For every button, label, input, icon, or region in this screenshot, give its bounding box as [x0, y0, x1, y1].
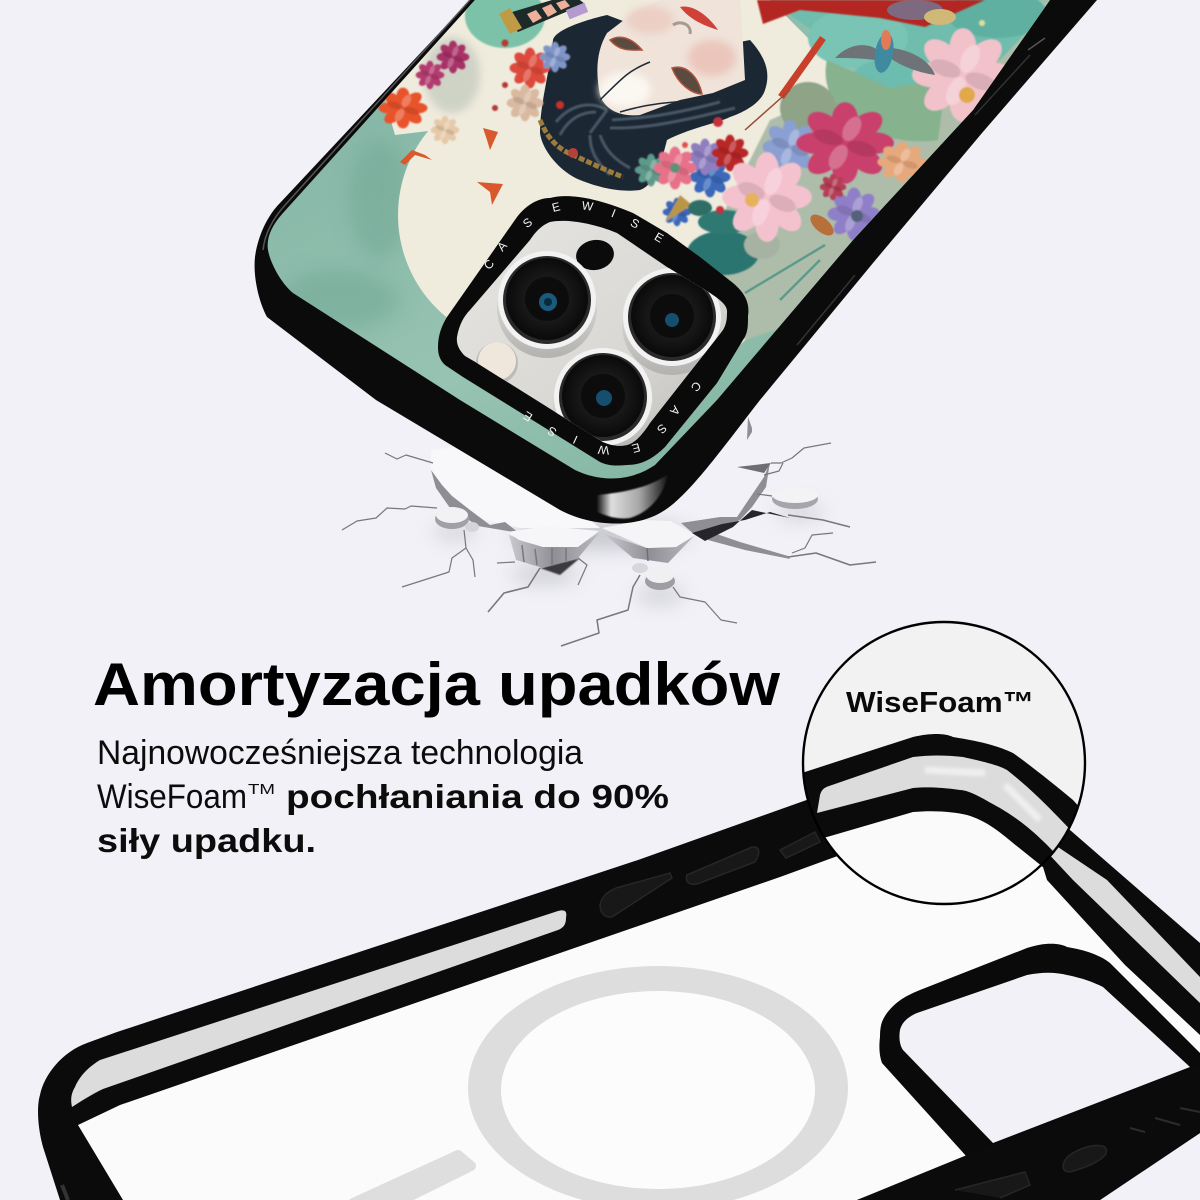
camera cutout frame — [879, 944, 1200, 1157]
flowers centre cluster — [635, 117, 748, 226]
left port — [62, 1185, 68, 1200]
microphone dot — [576, 240, 614, 270]
case outer shell — [255, 0, 1097, 524]
lens 2 — [622, 268, 722, 375]
hair — [540, 15, 767, 191]
brand text on camera ring: E — [550, 199, 562, 215]
crack lines — [342, 443, 876, 646]
stems — [745, 245, 825, 300]
dark crack gap — [692, 510, 790, 541]
butterflies — [400, 128, 503, 205]
camera lenses and sensors — [476, 237, 722, 455]
mist patches — [288, 145, 404, 330]
brand text on camera ring: S — [628, 215, 642, 232]
katana handle — [499, 0, 588, 34]
camera cutout opening — [899, 973, 1190, 1143]
brand text on camera ring: A — [494, 239, 510, 254]
description text — [97, 734, 669, 859]
button details on side — [797, 38, 1045, 345]
side buttons — [600, 832, 820, 917]
face — [597, 0, 745, 115]
flash — [476, 342, 518, 384]
slab dark edges — [431, 417, 790, 559]
brand text on camera ring: S — [520, 215, 535, 231]
flowers right — [722, 28, 1014, 242]
kimono — [757, 0, 985, 27]
big lotus leaves — [465, 0, 1048, 275]
magsafe pill — [353, 1155, 471, 1200]
chunk left — [507, 526, 599, 575]
chunk centre — [602, 520, 695, 563]
brand text on camera ring: W — [597, 442, 610, 457]
magnifier ring — [803, 622, 1085, 904]
flowers left — [379, 40, 570, 144]
label: WiseFoam™ — [846, 687, 1034, 719]
moon — [398, 120, 594, 318]
description text: siły upadku. — [97, 822, 316, 859]
foam strip right — [1045, 845, 1200, 1003]
island opening — [457, 221, 727, 446]
clear back panel — [78, 815, 1200, 1200]
brand text on camera ring: I — [609, 206, 618, 220]
bottom rim — [857, 1066, 1200, 1200]
magsafe ring — [468, 966, 848, 1200]
lens 1 — [497, 251, 597, 358]
brand text on camera ring — [481, 198, 704, 457]
brand text on camera ring: E — [652, 229, 666, 246]
brand text on camera ring: I — [571, 433, 580, 447]
bottom right reflections — [1130, 1108, 1200, 1132]
description text: Najnowocześniejsza technologia — [97, 734, 583, 772]
case bottom highlight — [597, 474, 668, 518]
top phone with printed case — [250, 0, 1100, 524]
heading: Amortyzacja upadków — [93, 651, 780, 718]
brand text on camera ring: C — [481, 256, 497, 272]
camera island — [438, 196, 748, 466]
brand text on camera ring: S — [654, 421, 670, 437]
description text: TM — [248, 781, 275, 798]
description text: WiseFoam — [97, 778, 247, 816]
hair ornament red stick — [781, 38, 823, 97]
impact shadow — [433, 506, 824, 602]
brand text on camera ring: C — [688, 379, 704, 395]
printed artwork — [268, 0, 1050, 478]
brand text on camera ring: W — [581, 198, 595, 214]
magnifier circle: WiseFoam — [802, 620, 1086, 906]
brand text on camera ring: S — [545, 423, 559, 440]
small debris — [435, 487, 818, 590]
raised slabs — [431, 440, 600, 528]
case rim reflections — [263, 0, 470, 250]
outer black frame — [38, 743, 1200, 1200]
foliage base right — [710, 0, 1050, 340]
bottom phone clear case — [38, 743, 1200, 1200]
cracked wall impact — [342, 417, 876, 646]
gold hair ornament — [540, 120, 623, 177]
lens 3 — [553, 348, 653, 455]
island black frame — [438, 196, 748, 466]
magnifier content — [804, 734, 1078, 865]
brand text on camera ring: E — [630, 440, 642, 456]
pale cloud behind figure — [385, 0, 840, 345]
hummingbird — [835, 30, 935, 75]
bottom ports — [955, 1145, 1107, 1198]
bee — [810, 214, 834, 236]
description text: pochłaniania do 90% — [286, 778, 669, 815]
hair strands — [556, 102, 735, 175]
foam strip left — [71, 910, 566, 1107]
brand text on camera ring: E — [521, 408, 535, 424]
brand text on camera ring: A — [667, 403, 683, 418]
